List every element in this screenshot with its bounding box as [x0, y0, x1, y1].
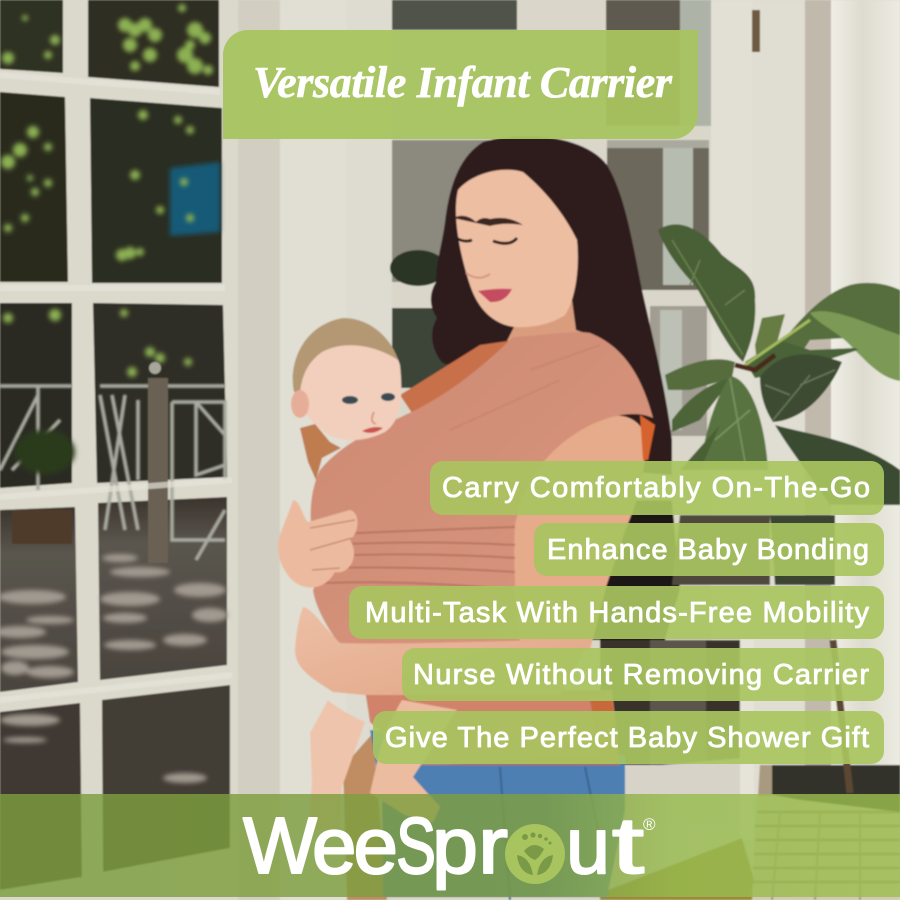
- garden bokeh: [1, 4, 213, 377]
- logo wordmark ending: u: [566, 801, 610, 890]
- planter box: [12, 510, 72, 544]
- logo wordmark letters: W: [243, 801, 317, 890]
- jeans: [370, 730, 625, 897]
- baby legs: [308, 700, 457, 830]
- shrub in porch: [15, 430, 75, 474]
- wrap strip over shoulder: [400, 340, 515, 425]
- WeeSprout logo: [243, 801, 656, 890]
- blue reflection: [170, 162, 220, 236]
- WeeSprout logo: t: [612, 801, 644, 890]
- benefit pill: gift: [373, 711, 884, 764]
- registered mark: ®: [643, 815, 656, 834]
- mother upper arm and elbow: [500, 416, 645, 650]
- title text: Versatile Infant Carrier: [253, 58, 673, 107]
- footer band: [0, 794, 900, 897]
- benefit pill: nursing: [402, 648, 884, 701]
- title banner: [223, 30, 698, 139]
- benefit pill: nursing: Nurse Without Removing Carrier: [413, 659, 869, 691]
- WeeSprout logo: p: [432, 801, 478, 890]
- woman: hair: [431, 136, 672, 475]
- benefit pill: carry comfortably: [430, 461, 884, 515]
- dark hair and shadow behind body: [590, 500, 680, 640]
- benefit pill: gift: Give The Perfect Baby Shower Gift: [385, 722, 869, 754]
- plant leaves: [658, 224, 900, 585]
- WeeSprout logo: ee: [312, 801, 398, 890]
- basket planter: [752, 640, 900, 900]
- benefit pill: carry comfortably: Carry Comfortably On-The-Go: [442, 472, 870, 504]
- porch railing: [0, 386, 225, 560]
- porch post: [148, 378, 168, 563]
- mother upper hand: [278, 500, 358, 588]
- baby scrunchie: [300, 424, 341, 480]
- left window panes with garden view: [0, 0, 232, 890]
- benefit pill: baby bonding: Enhance Baby Bonding: [547, 534, 869, 566]
- benefit pill: hands-free: [349, 586, 884, 639]
- woman: face and neck: [456, 170, 590, 362]
- logo sprout icon: [505, 824, 565, 884]
- WeeSprout logo: r: [478, 801, 508, 890]
- baby head: [291, 318, 401, 440]
- wrap main fabric: [311, 332, 653, 646]
- wrap lower band: [365, 690, 620, 765]
- frame highlight lines: [0, 75, 232, 700]
- benefit pill: baby bonding: [534, 523, 884, 576]
- dappled sun on deck: [0, 554, 228, 783]
- wrap tail hanging at side: [343, 733, 387, 900]
- woman: facial features: [453, 216, 523, 302]
- WeeSprout logo: S: [396, 801, 436, 890]
- mother lower arm and hand: [295, 607, 590, 695]
- floor: [600, 838, 760, 900]
- benefit pill: hands-free: Multi-Task With Hands-Free Mobility: [365, 597, 870, 629]
- centre and right window panes: [390, 0, 754, 840]
